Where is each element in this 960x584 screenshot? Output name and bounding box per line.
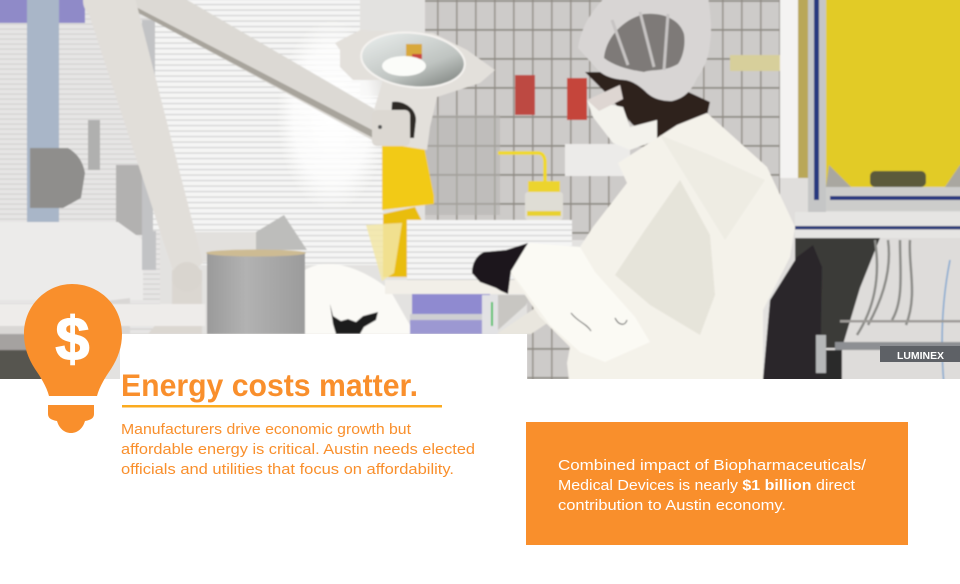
text block: energy affordability: affordable energy is critical. Austin needs elected [121,441,475,458]
icon: light bulb with dollar sign [24,284,122,433]
callout: biopharmaceutical impact: Combined impact of Biopharmaceuticals/ [558,457,867,474]
yellow bins [382,146,434,277]
chair [762,245,826,390]
text block: energy affordability: Manufacturers drive economic growth but [121,421,412,438]
callout: biopharmaceutical impact [526,422,908,545]
white coat [508,113,795,390]
photo credit tag: LUMINEX [897,350,944,362]
right equipment frame [780,0,960,390]
icon: light bulb with dollar sign: $ [56,305,90,373]
lamp arm [83,0,385,334]
callout: biopharmaceutical impact: contribution to Austin economy. [558,497,786,514]
panel: white text backdrop [0,334,960,584]
face and neck [585,72,710,144]
face mask [587,100,657,150]
hair net [578,0,711,101]
heading: Energy costs matter. [121,367,418,403]
stacked white trays [153,0,387,265]
text block: energy affordability [121,421,475,478]
panel: laboratory photo [0,0,960,390]
photo credit tag [880,346,960,362]
foil roll [206,215,307,334]
wash bottle [498,153,563,220]
left: plastic curtain [0,0,160,390]
magnifier lamp head [335,28,495,150]
black glove [472,243,528,294]
text block: energy affordability: officials and utilities that focus on affordability. [121,461,454,478]
technician [472,0,795,390]
metal wire rack [425,0,780,390]
heading underline [122,405,442,408]
bench items [0,220,572,334]
callout: biopharmaceutical impact: Medical Devices is nearly $1 billion direct [558,477,856,494]
